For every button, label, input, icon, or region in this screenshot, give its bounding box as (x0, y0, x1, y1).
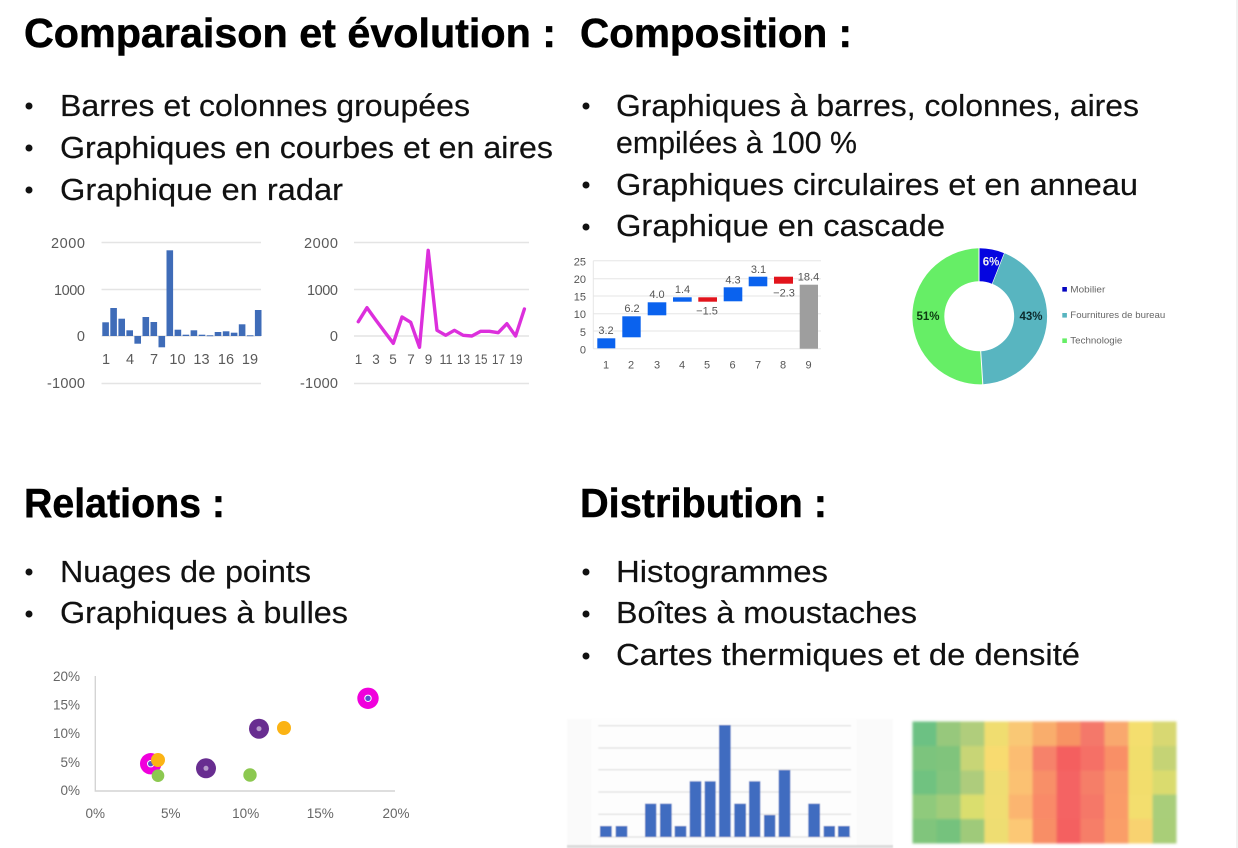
bubble chart (53, 669, 410, 821)
bubble chart: 0% (60, 783, 80, 798)
donut chart: 51% (916, 311, 940, 323)
legend (1062, 284, 1165, 346)
line chart: 0 (330, 329, 338, 345)
line chart: 5 (389, 352, 397, 367)
waterfall chart: 6 (729, 360, 736, 372)
waterfall chart (574, 256, 821, 372)
line chart: 2000 (304, 236, 338, 252)
line chart: 1000 (307, 283, 338, 299)
waterfall chart: 10 (574, 309, 586, 321)
legend: Mobilier (1070, 284, 1105, 296)
line chart (300, 236, 529, 392)
waterfall chart: 3 (654, 360, 660, 372)
line chart: 19 (510, 352, 522, 367)
column chart: 1 (102, 352, 110, 368)
bubble chart: 5% (60, 755, 80, 770)
list: composition chart types: Graphiques circulaires et en anneau (616, 167, 1138, 202)
column chart (47, 236, 262, 392)
line chart: 3 (372, 352, 380, 367)
legend: Technologie (1070, 336, 1122, 346)
heading: Comparaison et évolution: Comparaison et évolution : (24, 10, 556, 56)
list: distribution chart types: Boîtes à moustaches (616, 595, 917, 630)
list: relation chart types: Graphiques à bulles (60, 595, 348, 630)
list: distribution chart types: Cartes thermiques et de densité (616, 637, 1080, 672)
column chart: 13 (193, 352, 210, 368)
list: comparison chart types: Graphique en radar (60, 172, 343, 207)
column chart: 10 (169, 352, 186, 368)
waterfall chart: 7 (755, 360, 761, 372)
line chart: -1000 (300, 376, 338, 392)
list: composition chart types: Graphique en cascade (616, 208, 945, 243)
line chart: 9 (425, 352, 432, 367)
waterfall chart: 4 (679, 360, 685, 372)
list: comparison chart types (26, 88, 553, 207)
list: comparison chart types: Barres et colonnes groupées (60, 88, 470, 123)
bubble chart: 5% (161, 806, 180, 821)
column chart: 1000 (54, 283, 85, 299)
list: composition chart types: Graphiques à barres, colonnes, aires (616, 88, 1139, 123)
waterfall chart: 0 (580, 344, 586, 356)
list: distribution chart types: Histogrammes (616, 554, 828, 589)
waterfall chart: 18.4 (798, 272, 819, 284)
waterfall chart: 1.4 (675, 284, 690, 296)
waterfall chart: −2.3 (773, 288, 795, 300)
column chart: 16 (218, 352, 234, 368)
heading: Relations: Relations : (24, 480, 225, 526)
waterfall chart: 6.2 (624, 303, 640, 315)
heatmap (913, 722, 1177, 843)
list: comparison chart types: Graphiques en courbes et en aires (60, 130, 553, 165)
line chart: 7 (407, 352, 415, 367)
waterfall chart: 3.2 (598, 325, 614, 337)
bubble chart: 15% (307, 806, 334, 821)
line chart: 15 (474, 352, 488, 367)
waterfall chart: 4.3 (725, 275, 741, 287)
list: composition chart types: empilées à 100 % (616, 125, 857, 160)
histogram (567, 719, 893, 848)
donut chart: 6% (983, 257, 999, 269)
waterfall chart: −1.5 (696, 306, 718, 318)
bubble chart: 20% (382, 806, 410, 821)
bubble chart: 20% (53, 669, 80, 684)
waterfall chart: 3.1 (751, 264, 766, 276)
column chart: 7 (150, 352, 158, 368)
waterfall chart: 25 (574, 256, 586, 268)
column chart: 0 (77, 329, 85, 345)
column chart: -1000 (47, 376, 85, 392)
list: composition chart types (582, 88, 1139, 243)
waterfall chart: 20 (574, 274, 586, 286)
line chart: 1 (355, 352, 362, 367)
line chart: 11 (440, 352, 452, 367)
list: relation chart types: Nuages de points (60, 554, 311, 589)
donut chart: 43% (1019, 311, 1043, 323)
waterfall chart: 2 (628, 360, 634, 372)
waterfall chart: 15 (574, 292, 586, 304)
bubble chart: 10% (232, 806, 259, 821)
waterfall chart: 5 (704, 360, 710, 372)
waterfall chart: 5 (580, 327, 586, 339)
line chart: 17 (492, 352, 505, 367)
legend: Fournitures de bureau (1070, 310, 1165, 321)
bubble chart: 15% (53, 698, 80, 712)
heading: Composition: Composition : (580, 10, 852, 56)
column chart: 2000 (51, 236, 85, 252)
list: distribution chart types (582, 554, 1080, 672)
heading: Distribution: Distribution : (580, 480, 827, 526)
waterfall chart: 8 (780, 360, 786, 372)
column chart: 19 (242, 352, 258, 368)
waterfall chart: 1 (603, 360, 609, 372)
column chart: 4 (126, 352, 134, 368)
bubble chart: 10% (53, 726, 80, 741)
donut chart (912, 248, 1165, 384)
line chart: 13 (457, 352, 470, 367)
waterfall chart: 9 (805, 360, 812, 372)
waterfall chart: 4.0 (649, 289, 665, 301)
bubble chart: 0% (86, 806, 105, 821)
list: relation chart types (26, 554, 348, 630)
